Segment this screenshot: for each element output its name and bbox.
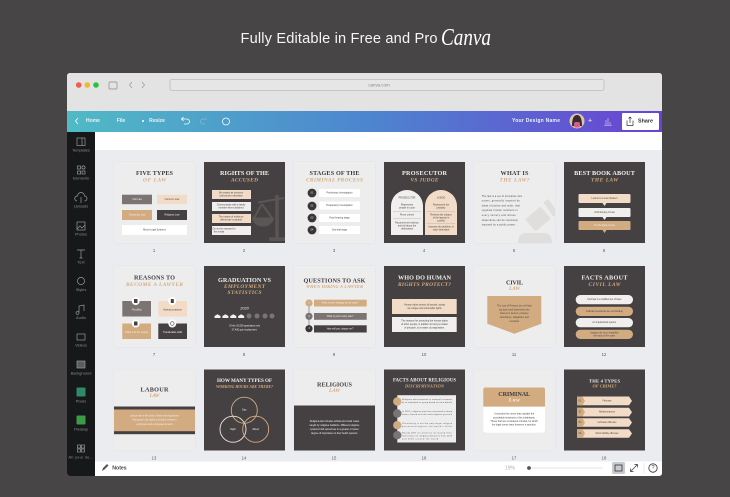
body text (482, 195, 522, 227)
slide 16: FACTS ABOUT RELIGIOUS (393, 378, 456, 383)
sidebar labels: Styles (76, 287, 86, 292)
arrow labels: 02 (579, 411, 582, 414)
arrow labels: Misdemeanors (599, 411, 616, 414)
slide 3: 01 (311, 192, 314, 194)
slide 17: It includes the norms that regulate the (494, 413, 535, 416)
arrow labels: 01 (579, 399, 582, 402)
arch: prosecutor: people in court (399, 206, 415, 210)
slide 7: Having a passion (163, 308, 182, 312)
slide 7 (114, 266, 196, 348)
page numbers: 16 (422, 456, 427, 460)
slide 17: CRIMINAL (498, 391, 530, 398)
sidebar labels: Templates (72, 148, 90, 152)
slide 8: 2020 (239, 307, 250, 311)
page numbers: 11 (512, 352, 517, 357)
slide 17: Law (508, 398, 520, 404)
arch: prosecutor: PROSECUTOR (399, 196, 416, 200)
icon: gavel (518, 200, 555, 243)
arch: judge: Represents the (433, 204, 450, 206)
arch: prosecutor (391, 190, 423, 235)
slide 15 (294, 369, 376, 451)
slide 5 (474, 162, 559, 244)
slide 16: Nearly 28% of countries increased their (402, 432, 452, 434)
slide 3 (294, 162, 376, 244)
slide 13: employers and employees at work (136, 423, 173, 426)
slide 12: Judicial precedents are not binding (586, 310, 623, 313)
slide 14: HOW MANY TYPES OF (217, 378, 272, 384)
arch: judge: JUDGE (437, 196, 445, 200)
sidebar labels: Background (71, 370, 91, 376)
slide 2: ACCUSED (230, 178, 258, 184)
slide 2: RIGHTS OF THE (220, 170, 269, 177)
slide 2: The means of evidence (219, 216, 244, 218)
slide 8 (204, 266, 285, 347)
slide 13: LAW (148, 393, 161, 399)
slide 18: OF CRIME? (592, 384, 617, 389)
slide 11: The Law of Persons (or civil law) (497, 304, 532, 308)
slide 6: On the Rule of Law (594, 224, 615, 227)
slide 12: CIVIL LAW (588, 282, 622, 288)
body text: norms, generally inspired by (482, 200, 520, 203)
slide 10: of other people, in addition to being a matter (401, 323, 448, 326)
slide 11: LAW (508, 286, 521, 292)
sidebar (67, 132, 95, 476)
slide 16: persecuted against the world's faiths (402, 425, 452, 428)
slide 9: 3 (308, 327, 310, 330)
slide 8: Of the 20,000 graduates only (229, 324, 261, 328)
body text: ideas of justice and order, that (482, 204, 520, 207)
slide 5: WHAT IS (500, 170, 529, 177)
pixabay icon (76, 416, 86, 424)
slide 16: states, based on faith and religious practice (402, 413, 453, 416)
icon: scales (252, 195, 285, 241)
slide 13 (114, 369, 196, 451)
page numbers: 17 (512, 456, 517, 460)
slide 1: OF LAW (143, 178, 167, 184)
browser title bar: canva.com (368, 82, 390, 88)
slide 8: EMPLOYMENT (223, 284, 266, 290)
sidebar labels: Audio (76, 315, 86, 320)
icon circles (132, 297, 176, 328)
arch: judge: Reviews the subject (430, 214, 452, 216)
slide 16: and 2020 around the world (402, 438, 438, 440)
slide 3: CRIMINAL PROCESS (306, 178, 363, 184)
body text: every society and whose (482, 214, 516, 217)
slide 6: A Dictionary of Law (594, 211, 615, 214)
page numbers: 6 (603, 248, 606, 253)
page numbers: 12 (602, 352, 607, 357)
slide 11: inheritance, obligations and (500, 316, 530, 319)
slide 14: Mixed (253, 428, 260, 431)
slide 11: CIVIL (506, 280, 523, 286)
slide 6: BEST BOOK ABOUT (574, 170, 636, 177)
slide 10: WHO DO HUMAN (398, 274, 452, 282)
page numbers: 10 (422, 352, 427, 357)
page numbers: 5 (513, 248, 516, 253)
arch: prosecutor: Represents (401, 204, 414, 206)
slide 1 (114, 162, 196, 244)
page numbers: 4 (423, 248, 426, 253)
slide 11: lay down and determines the (499, 308, 530, 312)
slide 3: Final hearing stage (329, 216, 350, 220)
body text: observance can be coercively (482, 219, 518, 222)
slide 16: DISCRIMINATION (404, 384, 445, 389)
slide 6: THE LAW (591, 178, 619, 184)
hexagon markers (393, 397, 402, 439)
slide 9: How will you charge me? (327, 328, 354, 330)
slide 16: Religious discrimination is unequal treatment (402, 398, 452, 401)
toolbar: File (117, 118, 126, 124)
pixels icon (76, 388, 86, 396)
slide 15: LAW (328, 388, 341, 394)
slide 3: 03 (311, 216, 314, 220)
slide 10: as refugee and vulnerable rights (407, 307, 442, 310)
slide 1: Civil Law (132, 198, 142, 201)
arch: judge (425, 190, 457, 235)
slide 7: Flexibility (132, 308, 142, 312)
slide 7: REASONS TO (134, 274, 175, 282)
slide 7: Helps a lot the society (125, 331, 149, 334)
heading (240, 25, 491, 51)
slide 15: Religious law includes ethical and moral codes (310, 420, 360, 423)
slide 13: LABOUR (140, 386, 169, 393)
slide 4: PROSECUTOR (402, 170, 448, 177)
slide 9: WHEN HIRING A LAWYER (306, 284, 363, 289)
slide 9: 2 (308, 315, 310, 318)
slide 3: 04 (311, 228, 314, 232)
slide 17: punishable behaviors of the inhabitants. (493, 416, 536, 419)
notes bar: ? (651, 465, 655, 471)
arrow labels: Inchoate offenses (598, 421, 617, 424)
toolbar: Your Design Name (512, 118, 560, 124)
slide 6: Letters to a Law Student (592, 197, 618, 200)
slide 1: Customary Law (129, 214, 146, 216)
page numbers: 9 (333, 352, 336, 357)
slide 15: taught by religious traditions. Different religious (310, 424, 360, 427)
arrow labels: 03 (579, 421, 582, 424)
slide 11 (474, 266, 556, 348)
page numbers: 18 (602, 456, 607, 460)
slide 8: 37,400 got employment. (232, 328, 258, 332)
slide 1: Religious Law (165, 214, 180, 216)
slide 8: STATISTICS (228, 290, 262, 296)
slide 16: In 2021, religious practices increased in many (402, 410, 452, 413)
slide 2: offered are excluded (220, 219, 243, 222)
slide 9: What is your hourly rate? (327, 315, 354, 318)
arch: prosecutor: and tell about the (398, 224, 417, 228)
body text: imposed by a public power. (482, 224, 516, 227)
slide 3: Preparatory Investigation (326, 204, 353, 207)
sidebar labels: Videos (75, 342, 87, 348)
slide 6 (564, 162, 645, 243)
slide 2: Be treated as innocent (219, 192, 243, 194)
sidebar labels (68, 148, 94, 460)
slide 2: the media (214, 231, 225, 234)
arch: prosecutor: defendants (401, 228, 414, 230)
page numbers: 2 (243, 248, 246, 253)
white ruler strip (95, 132, 662, 150)
slide 15: degree of importance to their belief systems. (311, 432, 358, 435)
slide 12: FACTS ABOUT (582, 274, 628, 282)
slide 1: Mixed Legal Systems (143, 228, 167, 232)
page numbers: 8 (243, 352, 246, 357)
notes bar (95, 462, 662, 476)
arrow labels: Felonies (602, 399, 612, 402)
arch: judge: judiciary (436, 206, 446, 210)
page numbers: 14 (242, 456, 247, 460)
toolbar: Home (86, 118, 100, 124)
sidebar labels: Text (77, 260, 85, 264)
slide 16: Christianity is not the only major religion (402, 422, 452, 425)
sidebar labels: Pixels (76, 398, 86, 404)
arch: judge: conflict (437, 220, 445, 222)
slide 7: BECOME A LAWYER (125, 282, 183, 288)
toolbar: Resize (149, 118, 165, 124)
slide 2 (204, 162, 285, 243)
slide 11: interest in person, property, (500, 312, 529, 315)
arrow labels: Strict liability offenses (596, 432, 619, 435)
sidebar labels: Uploads (74, 204, 88, 208)
sidebar labels: Elements (73, 176, 89, 180)
browser title bar (67, 73, 662, 111)
page numbers (152, 248, 607, 460)
slide 15: systems hold sacred law in a greater or lesser (310, 428, 359, 431)
slide 12: the facts of the case (594, 334, 616, 338)
slide 9: 1 (308, 302, 310, 304)
slide 2: until proven otherwise (219, 195, 243, 198)
arch: judge: of the lawsuit in (433, 216, 450, 220)
slide 13: that govern the rights and duties between (133, 419, 177, 422)
slide 14: Night (230, 428, 236, 431)
page numbers: 7 (153, 352, 156, 357)
arch: judge: each defendant (433, 228, 450, 232)
arrow labels (577, 396, 632, 438)
slide 18: THE 4 TYPES (589, 378, 620, 383)
slide 12: An inquisitorial system (592, 321, 616, 324)
slide 17: Those that are considered criminal, for which (490, 420, 539, 423)
page numbers: 15 (332, 456, 337, 460)
sidebar labels: Pixabay (74, 426, 88, 432)
slide 16 (384, 370, 465, 450)
slide 3: Preliminary Investigation (326, 192, 353, 194)
slide 10: RIGHTS PROTECT? (397, 282, 451, 288)
venn diagram (220, 397, 269, 442)
slide 1: FIVE TYPES (136, 170, 174, 177)
slide 4: VS JUDGE (410, 178, 439, 184)
slide 1: Common Law (165, 198, 180, 201)
graduation caps (214, 314, 274, 318)
slide 12 (564, 266, 645, 347)
body text: regulate human relations in (482, 209, 518, 212)
slide 10 (384, 266, 465, 347)
slide 17: the legal norms have foreseen a sanction. (492, 424, 537, 427)
slide 15: RELIGIOUS (317, 382, 353, 389)
notes bar: 19% (505, 466, 516, 472)
slide 7: Transferable skills (163, 331, 183, 334)
slide 5: THE LAW? (500, 178, 530, 184)
slide 10: of principle, is a matter of pragmatism. (404, 326, 445, 330)
slide 9 (294, 266, 376, 348)
slide 3: Oral trial stage (332, 228, 348, 232)
slide 12: Civil law is a codified set of laws (587, 298, 622, 301)
slide 17 (474, 369, 556, 451)
slide 16: restrictions on religious believers from 2019 (402, 434, 453, 438)
slide 3: STAGES OF THE (310, 170, 360, 177)
sidebar labels: Photos (75, 232, 87, 236)
slide 12: Judges rule as to establish (590, 331, 619, 334)
slide 10: Human rights protect all people, acting (404, 304, 446, 306)
arch: prosecutor: Recommend evidence (395, 222, 420, 224)
arch: judge: Imposes the problem of (429, 226, 454, 228)
browser window (67, 73, 662, 476)
page numbers: 13 (152, 456, 157, 460)
notes bar: Notes (112, 466, 127, 472)
page numbers: 1 (153, 248, 156, 253)
slide 3: 02 (311, 204, 314, 208)
slide 14 (204, 370, 285, 450)
slide 14: Day (242, 409, 247, 412)
arrow labels: 04 (579, 432, 582, 435)
slide 16: of an individual or group based on their beliefs (402, 401, 452, 404)
toolbar: + (588, 118, 592, 124)
toolbar (67, 111, 662, 132)
slide 2: member when detained (219, 207, 244, 210)
arch: prosecutor: Prove crimes (400, 214, 415, 216)
slide 2: Communicate with a family (217, 204, 246, 206)
slide 9: QUESTIONS TO ASK (304, 278, 366, 284)
slide 8: GRADUATION VS (218, 277, 272, 284)
slide 14: WORKING HOURS ARE THERE? (216, 385, 273, 389)
sidebar labels: All your de... (68, 454, 94, 460)
slide 4 (384, 162, 465, 243)
page numbers: 3 (333, 248, 336, 253)
slide 18 (564, 370, 645, 450)
body text: The law is a set of principles and (482, 195, 522, 198)
sidebar icons (75, 138, 87, 452)
heading: Canva (441, 25, 491, 51)
slide 13: Labour law is the body of laws and regulations (130, 415, 180, 418)
slide 10: The reasons for protecting the human rights (401, 320, 448, 322)
slide 2: Do not be exposed to (213, 228, 236, 230)
slide 11: contracts (509, 320, 520, 323)
slide 9: What is your strategy for my case? (322, 302, 359, 304)
heading: Fully Editable in Free and Pro (240, 31, 438, 47)
toolbar: Share (638, 118, 653, 124)
